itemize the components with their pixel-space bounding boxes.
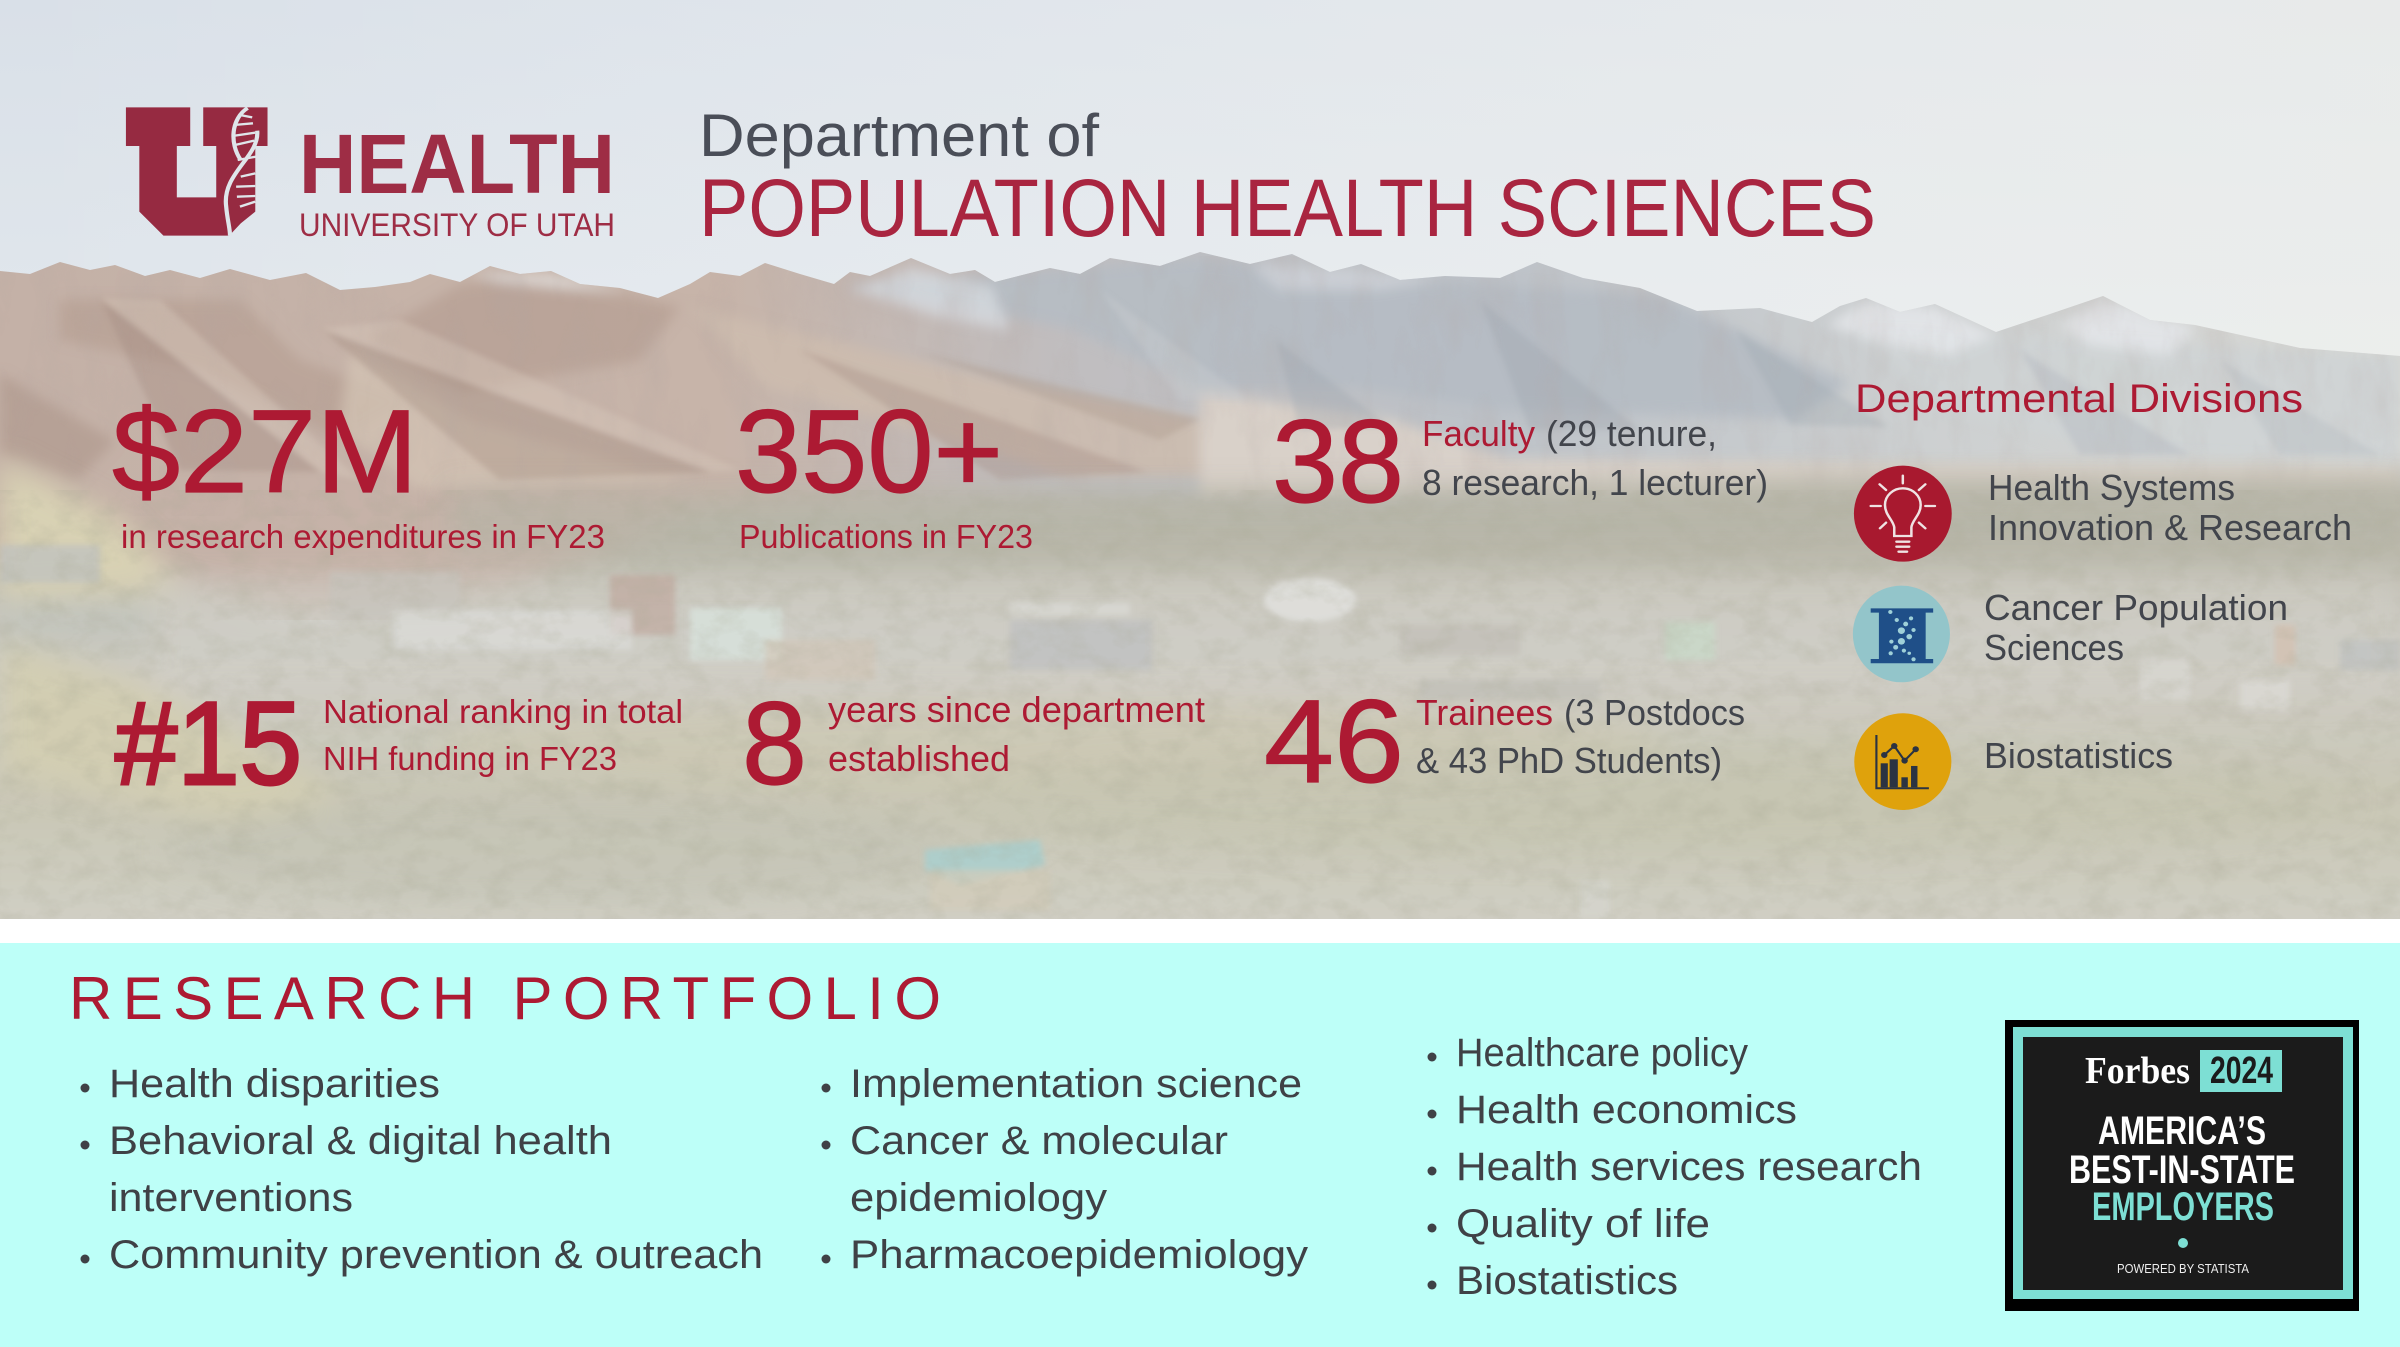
background photo: mountains and valley [0, 0, 2400, 980]
stat: years since established: 8 [742, 678, 807, 810]
badge: Forbes best-in-state employers [2005, 1020, 2359, 1311]
heading: research portfolio: RESEARCH PORTFOLIO [69, 965, 941, 1032]
list: portfolio column 3 [1428, 1031, 1922, 1303]
list: portfolio column 1: interventions [109, 1176, 353, 1220]
stat: faculty: (29 tenure, [1546, 413, 1717, 454]
badge headline: AMERICA’S [2098, 1109, 2266, 1153]
stat: NIH funding ranking: #15 [115, 678, 302, 810]
stat: trainees [1264, 676, 1745, 808]
list: portfolio column 2: Pharmacoepidemiology [850, 1233, 1308, 1277]
list: portfolio column 1: Community prevention & outreach [109, 1233, 763, 1277]
logo: University of Utah Health [126, 107, 615, 243]
stat: publications: Publications in FY23 [739, 518, 1033, 555]
stat: trainees: Trainees [1416, 692, 1553, 733]
list: portfolio column 3: Biostatistics [1456, 1259, 1678, 1303]
stat: years since established: established [828, 738, 1010, 779]
division: cancer population sciences: Sciences [1984, 627, 2124, 668]
list: portfolio column 2: Implementation science [850, 1062, 1302, 1106]
list: portfolio column 2 [822, 1062, 1308, 1277]
title line: Population Health Sciences: POPULATION HEALTH SCIENCES [699, 163, 1876, 254]
Forbes wordmark: Forbes [2085, 1050, 2190, 1092]
stat: faculty: 8 research, 1 lecturer) [1422, 462, 1768, 503]
icon: lightbulb [1854, 466, 1952, 562]
icon: bar and line chart [1854, 713, 1951, 810]
stat: trainees: 46 [1264, 676, 1404, 808]
division: health systems: Innovation & Research [1988, 507, 2352, 548]
stat: publications [735, 386, 1033, 555]
stat: trainees: (3 Postdocs [1564, 692, 1745, 733]
list: portfolio column 1: Behavioral & digital health [109, 1119, 612, 1163]
division: biostatistics: Biostatistics [1984, 735, 2173, 776]
title line: Department of: Department of [699, 102, 1099, 169]
list: portfolio column 3: Health economics [1456, 1088, 1797, 1132]
panel: departmental divisions [1853, 377, 2352, 810]
stat: faculty [1272, 396, 1768, 528]
list: portfolio column 1: Health disparities [109, 1062, 440, 1106]
stat: faculty: 38 [1272, 396, 1404, 528]
stat: faculty: Faculty [1422, 413, 1535, 454]
list: portfolio column 3: Quality of life [1456, 1202, 1710, 1246]
division: cancer population sciences: Cancer Population [1984, 587, 2288, 628]
list: portfolio column 2: Cancer & molecular [850, 1119, 1228, 1163]
list: portfolio column 1 [80, 1062, 763, 1277]
stat: NIH funding ranking [115, 678, 683, 810]
stat: trainees: & 43 PhD Students) [1416, 740, 1722, 781]
icon: block U with DNA helix [126, 107, 268, 236]
stat: years since established: years since department [828, 689, 1205, 730]
stat: NIH funding ranking: National ranking in total [323, 693, 683, 730]
badge headline: BEST-IN-STATE [2069, 1148, 2295, 1192]
list: portfolio column 3: Health services research [1456, 1145, 1922, 1189]
division: cancer population sciences [1984, 587, 2288, 668]
list: portfolio column 2: epidemiology [850, 1176, 1107, 1220]
stat: years since established [742, 678, 1205, 810]
year tag 2024: 2024 [2210, 1050, 2273, 1092]
badge headline [2069, 1109, 2295, 1229]
stat: research expenditures: in research expenditures in FY23 [121, 518, 605, 555]
heading: departmental divisions: Departmental Divisions [1855, 377, 2303, 421]
University of Utah wordmark: UNIVERSITY OF UTAH [299, 207, 615, 243]
title [699, 102, 1876, 254]
division: health systems: Health Systems [1988, 467, 2235, 508]
badge headline: EMPLOYERS [2092, 1185, 2274, 1229]
stat: publications: 350+ [735, 386, 1003, 518]
list: portfolio column 3: Healthcare policy [1456, 1031, 1748, 1075]
stat: NIH funding ranking: NIH funding in FY23 [323, 740, 617, 777]
white separator band [0, 919, 2400, 943]
icon: cancer cells [1853, 586, 1950, 682]
research portfolio panel background [0, 943, 2400, 1347]
division: health systems [1988, 467, 2352, 548]
stat: research expenditures [112, 386, 605, 555]
stat: research expenditures: $27M [112, 386, 418, 518]
powered by Statista: POWERED BY STATISTA [2117, 1261, 2249, 1276]
HEALTH wordmark: HEALTH [299, 117, 615, 211]
